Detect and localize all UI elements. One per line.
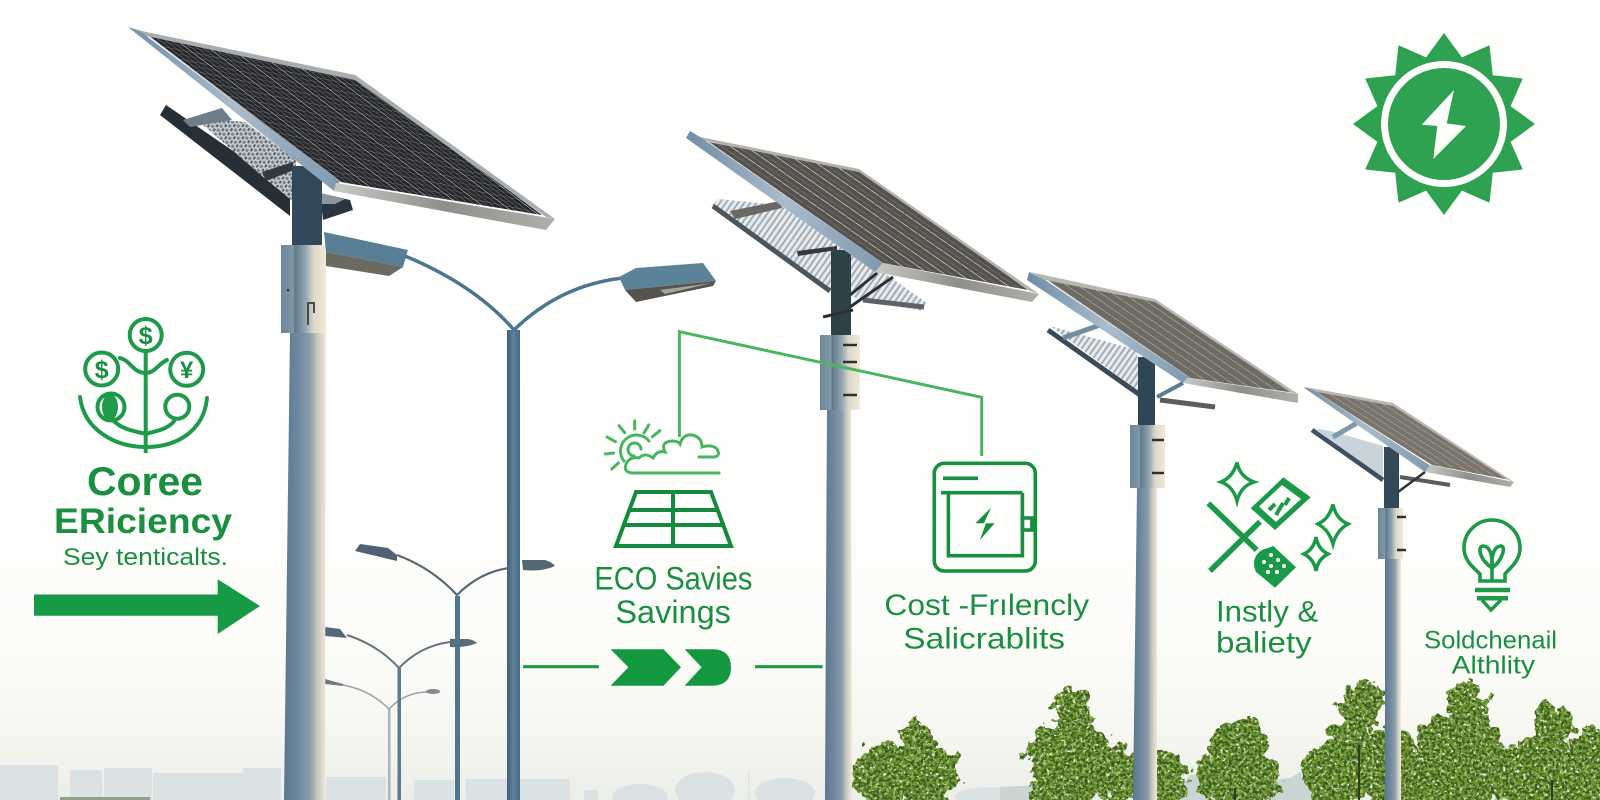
lamp near bbox=[355, 544, 555, 800]
heading: Cost-Friendly Salicrablits: Cost -Frılencly bbox=[884, 589, 1089, 622]
solar panel bbox=[686, 131, 1039, 302]
upper mast and braces bbox=[1384, 447, 1450, 509]
pole bbox=[1385, 559, 1401, 800]
flow lines bbox=[523, 665, 823, 668]
upper mast and braces bbox=[823, 250, 893, 335]
panel: core efficiency bbox=[34, 319, 260, 634]
heading: ECO Savies Savings bbox=[594, 560, 752, 630]
heading: Coree ERiciency: ERiciency bbox=[54, 502, 233, 541]
LED fixture bbox=[1312, 423, 1383, 480]
pole bbox=[1133, 488, 1157, 800]
heading: Cost-Friendly Salicrablits: Salicrablits bbox=[903, 622, 1065, 655]
panel: installation and safety bbox=[1208, 462, 1348, 660]
arm luminaire left bbox=[324, 232, 408, 276]
solar panel bbox=[128, 27, 555, 230]
double-arm lamp post bbox=[405, 256, 716, 800]
LED fixture bbox=[160, 105, 353, 220]
icon: sun and cloud bbox=[605, 421, 719, 473]
icon: crossed tools with sparkles bbox=[1208, 462, 1348, 588]
heading: Soldchenail Althlity: Soldchenail bbox=[1424, 626, 1557, 654]
panel: sustainability bbox=[1424, 520, 1557, 679]
small background street lamps bbox=[325, 544, 555, 800]
lamp far bbox=[325, 679, 440, 800]
solar panel bbox=[1303, 387, 1514, 487]
icon: money tree: $ bbox=[95, 356, 109, 384]
distant city skyline bbox=[0, 765, 1320, 800]
mount bracket bbox=[820, 335, 860, 410]
heading: Soldchenail Althlity: Althlity bbox=[1452, 651, 1536, 679]
icon: money tree: $ bbox=[139, 322, 153, 350]
heading: ECO Savies Savings: Savings bbox=[615, 594, 731, 630]
icon: battery box bbox=[934, 463, 1035, 571]
mount bracket bbox=[1130, 425, 1165, 488]
solar street light 3 bbox=[1027, 272, 1298, 800]
icon: money tree bbox=[80, 319, 207, 453]
heading: Coree ERiciency: Coree bbox=[87, 460, 203, 504]
icon: green sun badge with lightning bolt bbox=[1353, 33, 1535, 215]
upper mast and braces bbox=[1138, 357, 1215, 425]
icon: light bulb with sprout bbox=[1464, 520, 1520, 610]
solar street light 2 bbox=[686, 131, 1039, 800]
panel: cost-friendly bbox=[884, 463, 1089, 655]
lamp middle bbox=[325, 627, 477, 800]
upper mast bbox=[292, 166, 322, 246]
heading: Coree ERiciency bbox=[54, 460, 233, 541]
solar street light 1 bbox=[128, 27, 555, 800]
chevron arrows bbox=[611, 649, 731, 686]
LED fixture bbox=[1048, 325, 1140, 395]
mount bracket bbox=[281, 245, 326, 333]
icon: solar panel bbox=[616, 492, 731, 546]
subtitle: Sey tenticalts. bbox=[63, 544, 228, 571]
heading: Soldchenail Althlity bbox=[1424, 626, 1557, 679]
heading: Instly & baliety: baliety bbox=[1216, 627, 1312, 660]
solar street light 4 bbox=[1303, 387, 1514, 800]
heading: Instly & baliety bbox=[1216, 596, 1318, 660]
panel: eco savings bbox=[523, 421, 823, 686]
arrow: right bbox=[34, 579, 260, 634]
icon: money tree: ¥ bbox=[180, 357, 194, 384]
connector line between eco savings and cost-friendly bbox=[679, 332, 982, 456]
mount bracket bbox=[1378, 508, 1406, 559]
heading: ECO Savies Savings: ECO Savies bbox=[594, 560, 752, 596]
LED fixture bbox=[712, 199, 927, 311]
pole bbox=[284, 333, 326, 800]
heading: Instly & baliety: Instly & bbox=[1216, 596, 1318, 629]
heading: Cost-Friendly Salicrablits bbox=[884, 589, 1089, 655]
trees bbox=[855, 681, 1600, 800]
solar panel bbox=[1027, 272, 1298, 403]
pole bbox=[825, 405, 852, 800]
